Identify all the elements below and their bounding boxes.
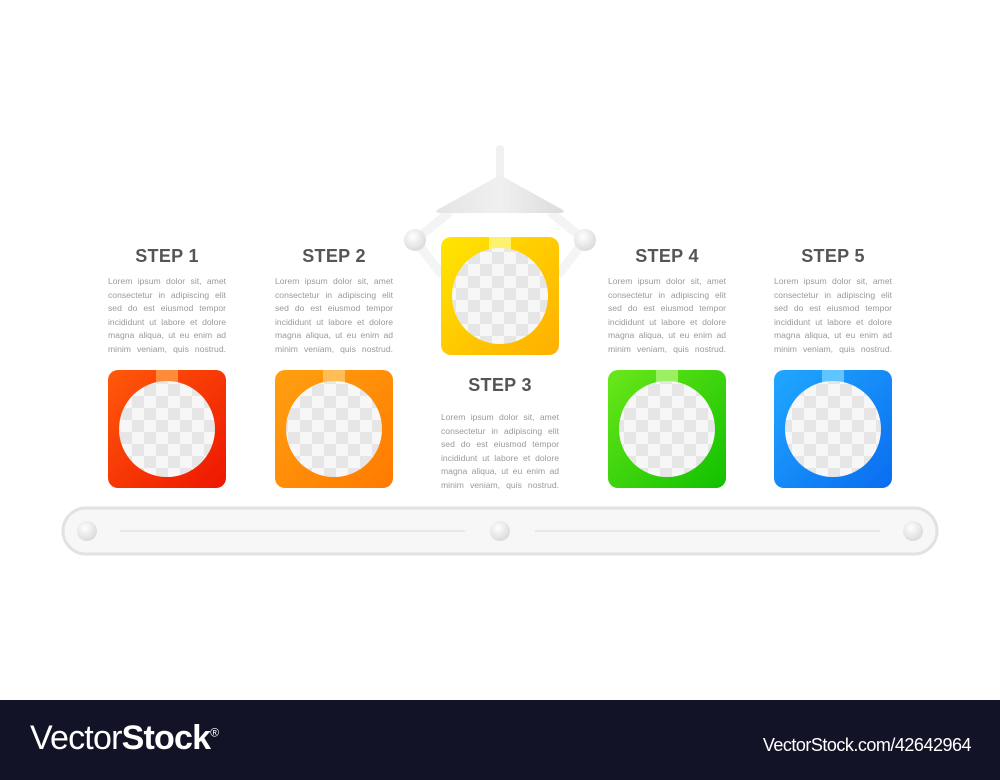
heading step 2: STEP 2 xyxy=(302,246,366,266)
footer url: VectorStock.com/42642964 xyxy=(763,735,971,755)
text step 1 xyxy=(108,276,226,354)
text step 1: magna aliqua, ut eu enim ad xyxy=(108,330,226,340)
text step 5: magna aliqua, ut eu enim ad xyxy=(774,330,892,340)
text step 1: sed do est eiusmod tempor xyxy=(108,303,226,313)
text step 3: incididunt ut labore et dolore xyxy=(441,452,559,462)
text step 2: Lorem ipsum dolor sit, amet xyxy=(275,276,393,286)
text step 5: consectetur in adipiscing elit xyxy=(774,290,892,300)
text step 5: incididunt ut labore et dolore xyxy=(774,316,892,326)
text step 5 xyxy=(774,276,892,354)
text step 3: Lorem ipsum dolor sit, amet xyxy=(441,412,559,422)
box step 2 xyxy=(275,370,393,488)
text step 2: minim veniam, quis nostrud. xyxy=(275,344,393,354)
text step 3 xyxy=(441,412,559,490)
text step 2: incididunt ut labore et dolore xyxy=(275,316,393,326)
text step 2: magna aliqua, ut eu enim ad xyxy=(275,330,393,340)
box step 1 xyxy=(108,370,226,488)
text step 3: consectetur in adipiscing elit xyxy=(441,426,559,436)
lamp hanger xyxy=(404,145,596,275)
footer logo: VectorStock® xyxy=(30,719,218,757)
text step 4 xyxy=(608,276,726,354)
text step 5: minim veniam, quis nostrud. xyxy=(774,344,892,354)
box step 3 xyxy=(441,237,559,355)
text step 3: magna aliqua, ut eu enim ad xyxy=(441,466,559,476)
text step 2 xyxy=(275,276,393,354)
heading step 5: STEP 5 xyxy=(801,246,865,266)
text step 1: incididunt ut labore et dolore xyxy=(108,316,226,326)
text step 1: consectetur in adipiscing elit xyxy=(108,290,226,300)
text step 1: Lorem ipsum dolor sit, amet xyxy=(108,276,226,286)
heading step 4: STEP 4 xyxy=(635,246,699,266)
text step 4: sed do est eiusmod tempor xyxy=(608,303,726,313)
text step 4: magna aliqua, ut eu enim ad xyxy=(608,330,726,340)
conveyor xyxy=(63,508,937,554)
text step 1: minim veniam, quis nostrud. xyxy=(108,344,226,354)
box step 5 xyxy=(774,370,892,488)
text step 4: incididunt ut labore et dolore xyxy=(608,316,726,326)
text step 2: sed do est eiusmod tempor xyxy=(275,303,393,313)
text step 3: minim veniam, quis nostrud. xyxy=(441,480,559,490)
box step 4 xyxy=(608,370,726,488)
text step 2: consectetur in adipiscing elit xyxy=(275,290,393,300)
text step 4: minim veniam, quis nostrud. xyxy=(608,344,726,354)
heading step 3: STEP 3 xyxy=(468,375,532,395)
text step 3: sed do est eiusmod tempor xyxy=(441,439,559,449)
text step 5: sed do est eiusmod tempor xyxy=(774,303,892,313)
text step 4: Lorem ipsum dolor sit, amet xyxy=(608,276,726,286)
footer bar xyxy=(0,700,1000,780)
heading step 1: STEP 1 xyxy=(135,246,199,266)
text step 5: Lorem ipsum dolor sit, amet xyxy=(774,276,892,286)
text step 4: consectetur in adipiscing elit xyxy=(608,290,726,300)
